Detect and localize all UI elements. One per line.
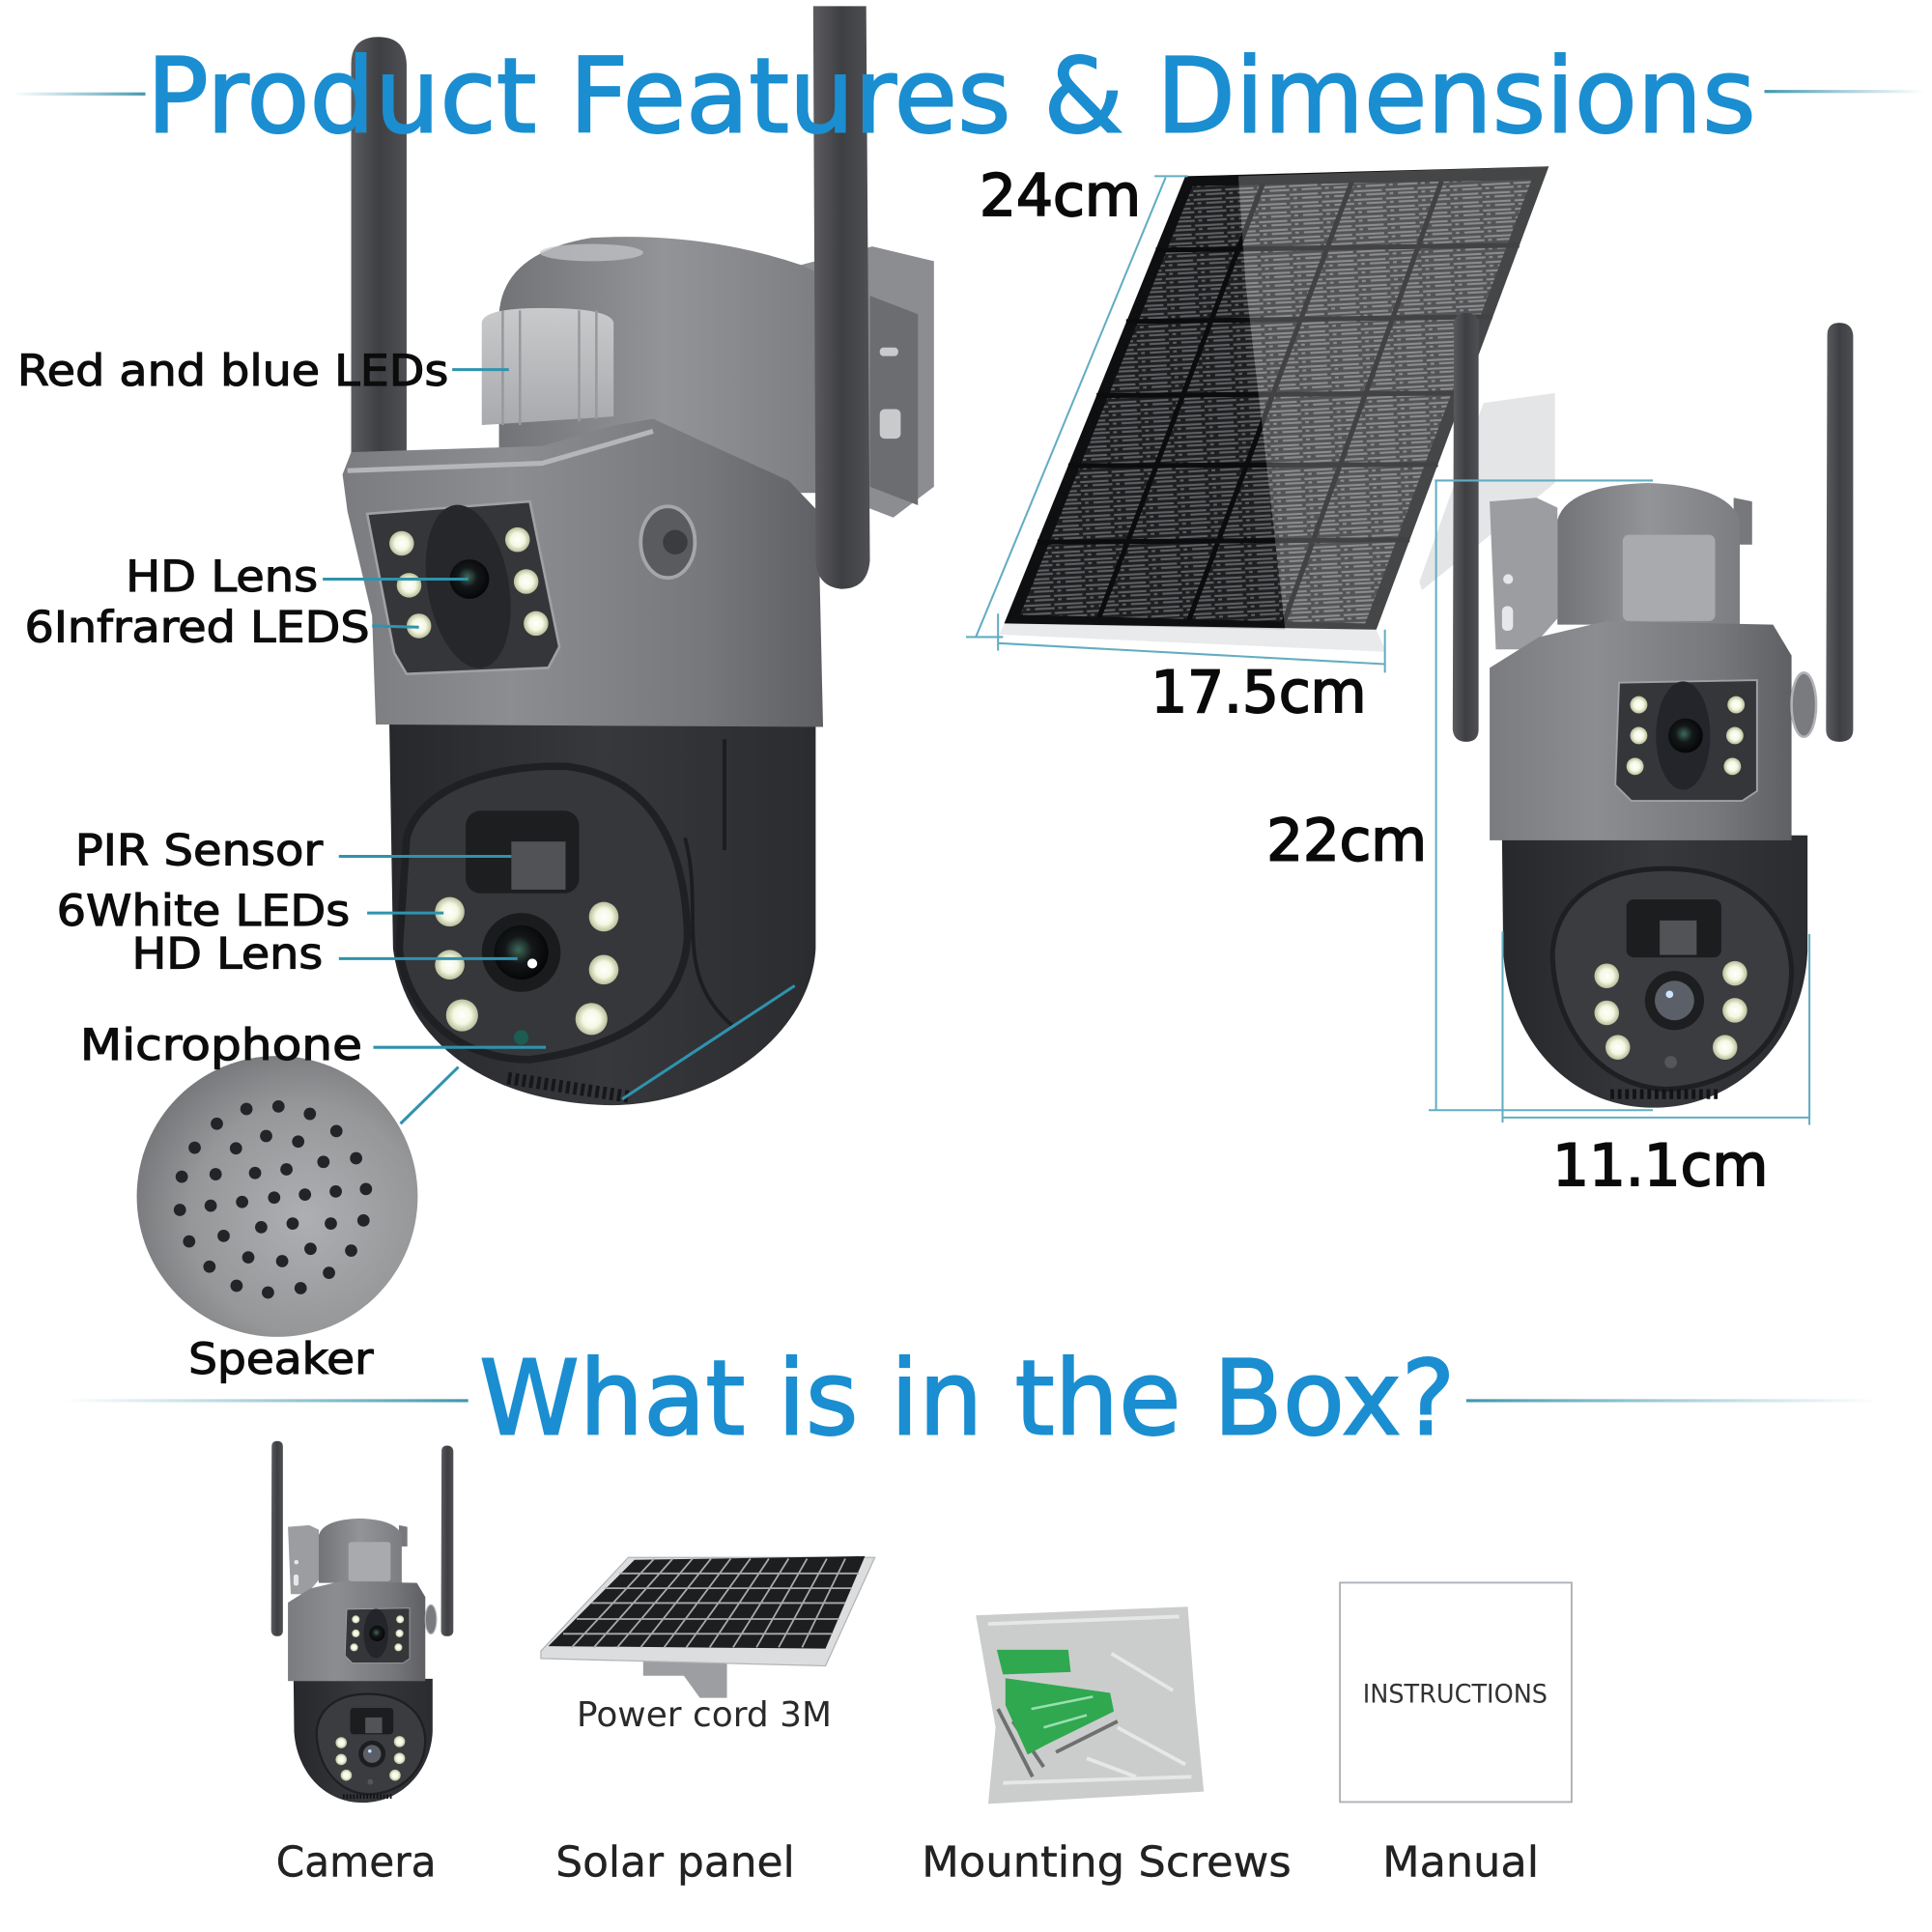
side microphone [1664, 1056, 1677, 1068]
side face [1552, 868, 1792, 1090]
solar panel [999, 166, 1548, 652]
box heading text: What is in the Box? [479, 1340, 1455, 1460]
panel grid lines [1037, 182, 1520, 622]
upper lens oval [413, 498, 523, 675]
power cord label: Power cord 3M [577, 1695, 832, 1735]
side grille [1610, 1091, 1718, 1098]
dimension lines: solar panel [966, 176, 1385, 672]
label: infrared LEDs: 6Infrared LEDS [25, 603, 370, 653]
dark lower dome [389, 724, 815, 1105]
side body [1490, 621, 1792, 840]
feature labels [17, 346, 448, 1384]
green wall plugs [997, 1650, 1114, 1754]
box item: camera [271, 1441, 453, 1803]
panel cells [1020, 180, 1531, 623]
caption: camera: Camera [276, 1839, 437, 1888]
plastic bag [976, 1606, 1204, 1804]
side PIR window [1627, 899, 1721, 957]
PIR sensor [511, 841, 565, 890]
frame [541, 1557, 875, 1665]
side lens panel [1615, 680, 1757, 801]
box rule right [1466, 1399, 1879, 1403]
heading text: Product Features & Dimensions [147, 37, 1756, 156]
side bracket [1490, 497, 1752, 649]
side antenna right [1826, 323, 1853, 742]
bracket [643, 1661, 727, 1698]
dimension: 22cm: 22cm [1266, 807, 1427, 874]
side oval [1656, 681, 1710, 790]
side antenna left [1453, 313, 1479, 742]
microphone dot [514, 1030, 528, 1045]
main lens [482, 913, 560, 992]
PIR sensor window [466, 810, 579, 894]
label: red and blue LEDs: Red and blue LEDs [17, 346, 448, 396]
box rule left [62, 1399, 469, 1403]
red and blue LED cylinder [482, 308, 613, 425]
dimension: 11.1cm: 11.1cm [1552, 1132, 1768, 1200]
dome side seam [685, 739, 732, 1025]
callout lines: main camera [323, 370, 795, 1123]
box item: mounting screws [976, 1606, 1204, 1804]
caption: mounting screws: Mounting Screws [922, 1839, 1292, 1888]
dimension: 17.5cm: 17.5cm [1151, 659, 1367, 726]
speaker grille [508, 1078, 629, 1096]
caption: solar panel: Solar panel [555, 1839, 795, 1888]
box item: solar panel [541, 1556, 875, 1698]
manual outline [1340, 1582, 1572, 1802]
side infrared LEDs [1627, 696, 1745, 775]
side mount knob [640, 506, 695, 578]
upper lens [450, 559, 489, 599]
upper lens panel [367, 498, 559, 675]
panel glass edge [999, 623, 1386, 652]
box captions [276, 1839, 1539, 1888]
cell lines [563, 1559, 859, 1647]
infrared LEDs [389, 527, 549, 639]
camera front face [399, 766, 688, 1060]
upper dome housing [499, 237, 828, 493]
side white LEDs [1595, 961, 1747, 1060]
antenna: right [813, 6, 870, 589]
caption: manual: Manual [1382, 1839, 1539, 1888]
screws [998, 1709, 1118, 1776]
side upper lens [1668, 719, 1703, 753]
manual text: INSTRUCTIONS [1363, 1680, 1548, 1710]
main camera [343, 6, 934, 1105]
panel surface [1005, 166, 1548, 630]
upper body block [343, 419, 823, 727]
label: white LEDs: 6White LEDs [57, 886, 350, 936]
side camera [1453, 313, 1853, 1108]
dimension: 24cm: 24cm [980, 162, 1141, 230]
label: speaker: Speaker [188, 1334, 374, 1384]
left shading [1005, 176, 1285, 630]
heading: product features [13, 37, 1924, 156]
antenna: left [352, 37, 407, 456]
heading: in the box [62, 1340, 1879, 1460]
label: PIR sensor: PIR Sensor [75, 825, 324, 875]
speaker holes [174, 1100, 372, 1298]
side dark dome [1502, 836, 1807, 1108]
label: HD lens upper: HD Lens [126, 552, 318, 602]
white LEDs [435, 897, 618, 1035]
speaker ball [137, 1056, 417, 1337]
side clear cylinder [1623, 535, 1716, 621]
rear wall bracket [801, 246, 934, 518]
box item: manual [1340, 1582, 1572, 1802]
side main lens [1645, 971, 1704, 1030]
side knob [1792, 672, 1816, 737]
side dome top [1557, 483, 1740, 625]
panel reflection [1238, 166, 1548, 630]
heading rule right [1765, 90, 1924, 93]
side PIR sensor [1660, 921, 1696, 955]
clear mounting plate [1419, 393, 1555, 590]
label: microphone: Microphone [80, 1020, 362, 1070]
cells [549, 1556, 865, 1649]
dimension lines: side camera [1429, 480, 1809, 1125]
dimension values [980, 162, 1768, 1200]
heading rule left [13, 93, 146, 96]
label: HD lens lower: HD Lens [131, 929, 323, 980]
